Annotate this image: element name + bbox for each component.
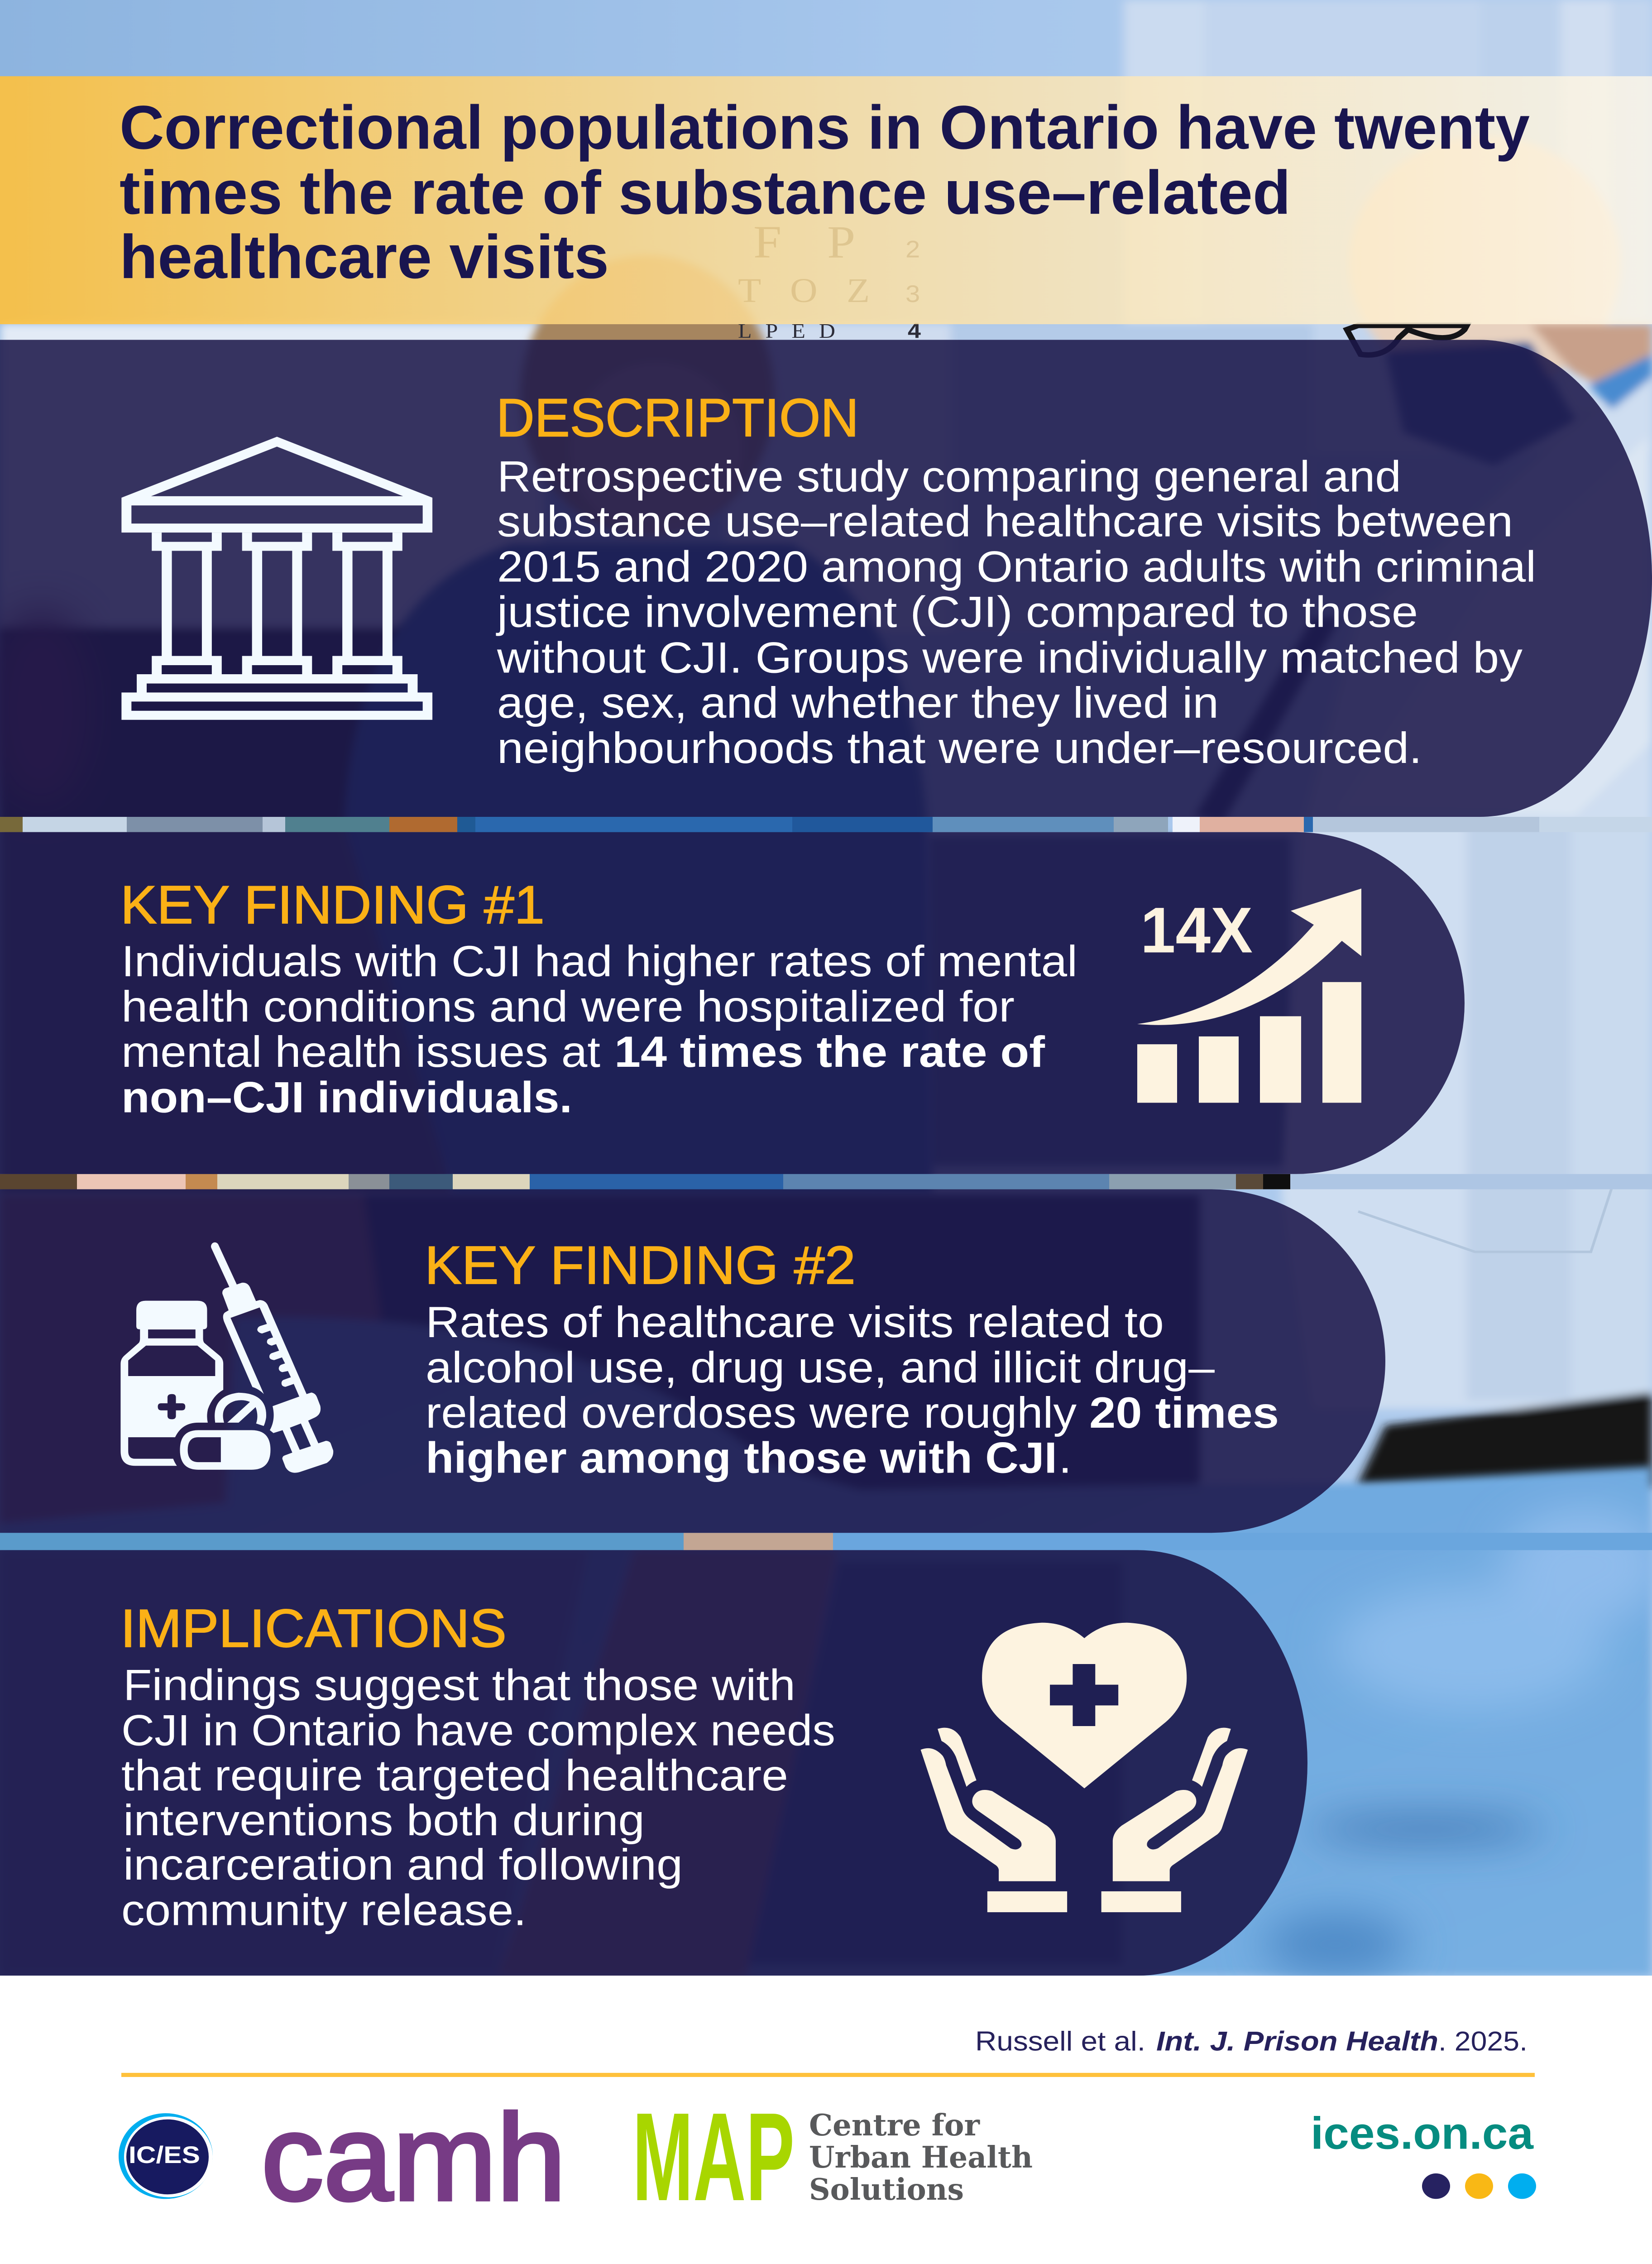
citation: . 2025.: [1438, 2026, 1528, 2057]
text block: key finding 2: related overdoses were roughly: [426, 1389, 1077, 1437]
text block: key finding 2: [426, 1298, 1279, 1482]
text block: description: 2015 and 2020 among Ontario adults with criminal: [497, 542, 1536, 591]
heading: title: healthcare visits: [120, 222, 609, 292]
panel: implications: [0, 1550, 1307, 1976]
chart icon: rising bars with arrow and 14X: 14X: [1140, 894, 1253, 966]
eye chart: F: [753, 217, 781, 268]
eye chart: O: [790, 271, 818, 310]
eye chart: T: [738, 271, 761, 310]
citation: Int. J. Prison Health: [1156, 2026, 1438, 2057]
text block: key finding 2: alcohol use, drug use, and illicit drug–: [426, 1343, 1215, 1392]
text block: description: age, sex, and whether they lived in: [497, 678, 1219, 727]
heading: key finding 1: KEY FINDING #1: [120, 874, 545, 935]
logo text: Centre for Urban Health Solutions: Urban Health: [809, 2140, 1033, 2175]
footer background: [0, 1976, 1652, 2264]
website link text: ices.on.ca: [1311, 2108, 1534, 2158]
text block: key finding 1: non–CJI individuals.: [121, 1073, 572, 1122]
text block: description: substance use–related healthcare visits between: [497, 497, 1513, 546]
panel: description: [0, 340, 1652, 817]
text block: description: justice involvement (CJI) compared to those: [496, 588, 1418, 637]
doctor's glasses: [1347, 326, 1467, 355]
patient and bed: [0, 1194, 1652, 1976]
logo text: Centre for Urban Health Solutions: Solutions: [809, 2172, 964, 2207]
panel: key finding 1: [0, 832, 1465, 1174]
text block: implications: community release.: [121, 1886, 527, 1934]
logo: camh: camh: [261, 2089, 566, 2226]
eye chart: 3: [905, 280, 920, 307]
text block: key finding 2: 20 times: [1089, 1389, 1279, 1437]
heading: title: [120, 93, 1530, 292]
text block: key finding 2: Rates of healthcare visits related to: [426, 1298, 1164, 1347]
chart icon: rising bars with arrow and 14X: [1137, 888, 1361, 1103]
text block: implications: [121, 1661, 835, 1934]
text block: description: neighbourhoods that were under–resourced.: [497, 724, 1422, 772]
coat pocket line: [1358, 1188, 1612, 1252]
text block: implications: that require targeted healthcare: [121, 1751, 788, 1800]
heading: title: times the rate of substance use–related: [120, 158, 1291, 227]
heading: key finding 2: KEY FINDING #2: [425, 1235, 856, 1295]
eye chart: LPED: [738, 320, 849, 342]
eye chart: P: [827, 217, 855, 268]
doctor figure: [1195, 136, 1652, 1487]
text block: key finding 1: [121, 937, 1077, 1122]
citation: Russell et al.: [975, 2026, 1145, 2057]
text block: implications: CJI in Ontario have complex needs: [121, 1706, 835, 1755]
heading: implications: IMPLICATIONS: [120, 1598, 507, 1659]
text block: key finding 1: Individuals with CJI had higher rates of mental: [121, 937, 1077, 986]
text block: key finding 2: higher among those with CJI: [426, 1434, 1057, 1482]
text block: implications: incarceration and following: [123, 1841, 683, 1889]
logo text: Centre for Urban Health Solutions: [809, 2108, 1033, 2207]
heading: title: Correctional populations in Ontario have twenty: [120, 93, 1530, 162]
logo text: Centre for Urban Health Solutions: Centre for: [809, 2108, 980, 2143]
logo: IC/ES: [119, 2113, 213, 2199]
photo strip between description and finding 1: [0, 817, 1652, 832]
title band: [0, 76, 1652, 324]
icon: classical building: [121, 437, 432, 720]
three brand dots: [1422, 2173, 1536, 2199]
photo strip between finding 1 and finding 2: [0, 1174, 1652, 1189]
footer rule: [121, 2073, 1535, 2077]
text block: description: Retrospective study comparing general and: [497, 452, 1401, 501]
logo: MAP: MAP: [632, 2087, 795, 2227]
icon: medicine bottle, pills and syringe: [120, 1247, 333, 1473]
eye chart: 4: [908, 318, 921, 342]
logo: IC/ES: IC/ES: [129, 2142, 200, 2168]
eye chart: 2: [905, 236, 920, 263]
icon: hands holding heart with cross: [921, 1623, 1248, 1912]
text block: key finding 2: .: [1058, 1434, 1072, 1482]
text block: key finding 1: mental health issues at: [121, 1028, 600, 1076]
text block: implications: interventions both during: [123, 1796, 645, 1845]
text block: implications: Findings suggest that those with: [123, 1661, 795, 1709]
text block: key finding 1: 14 times the rate of: [614, 1028, 1045, 1076]
photo strip between finding 2 and implications: [0, 1533, 1652, 1550]
citation: [975, 2026, 1528, 2057]
eye chart: Z: [847, 271, 870, 310]
panel: key finding 2: [0, 1189, 1385, 1533]
text block: description: [496, 452, 1536, 772]
nurse figure: [344, 255, 933, 1194]
text block: description: without CJI. Groups were individually matched by: [497, 633, 1523, 682]
heading: description: DESCRIPTION: [496, 388, 859, 448]
text block: key finding 1: health conditions and were hospitalized for: [121, 983, 1015, 1031]
eye chart: [738, 217, 921, 342]
